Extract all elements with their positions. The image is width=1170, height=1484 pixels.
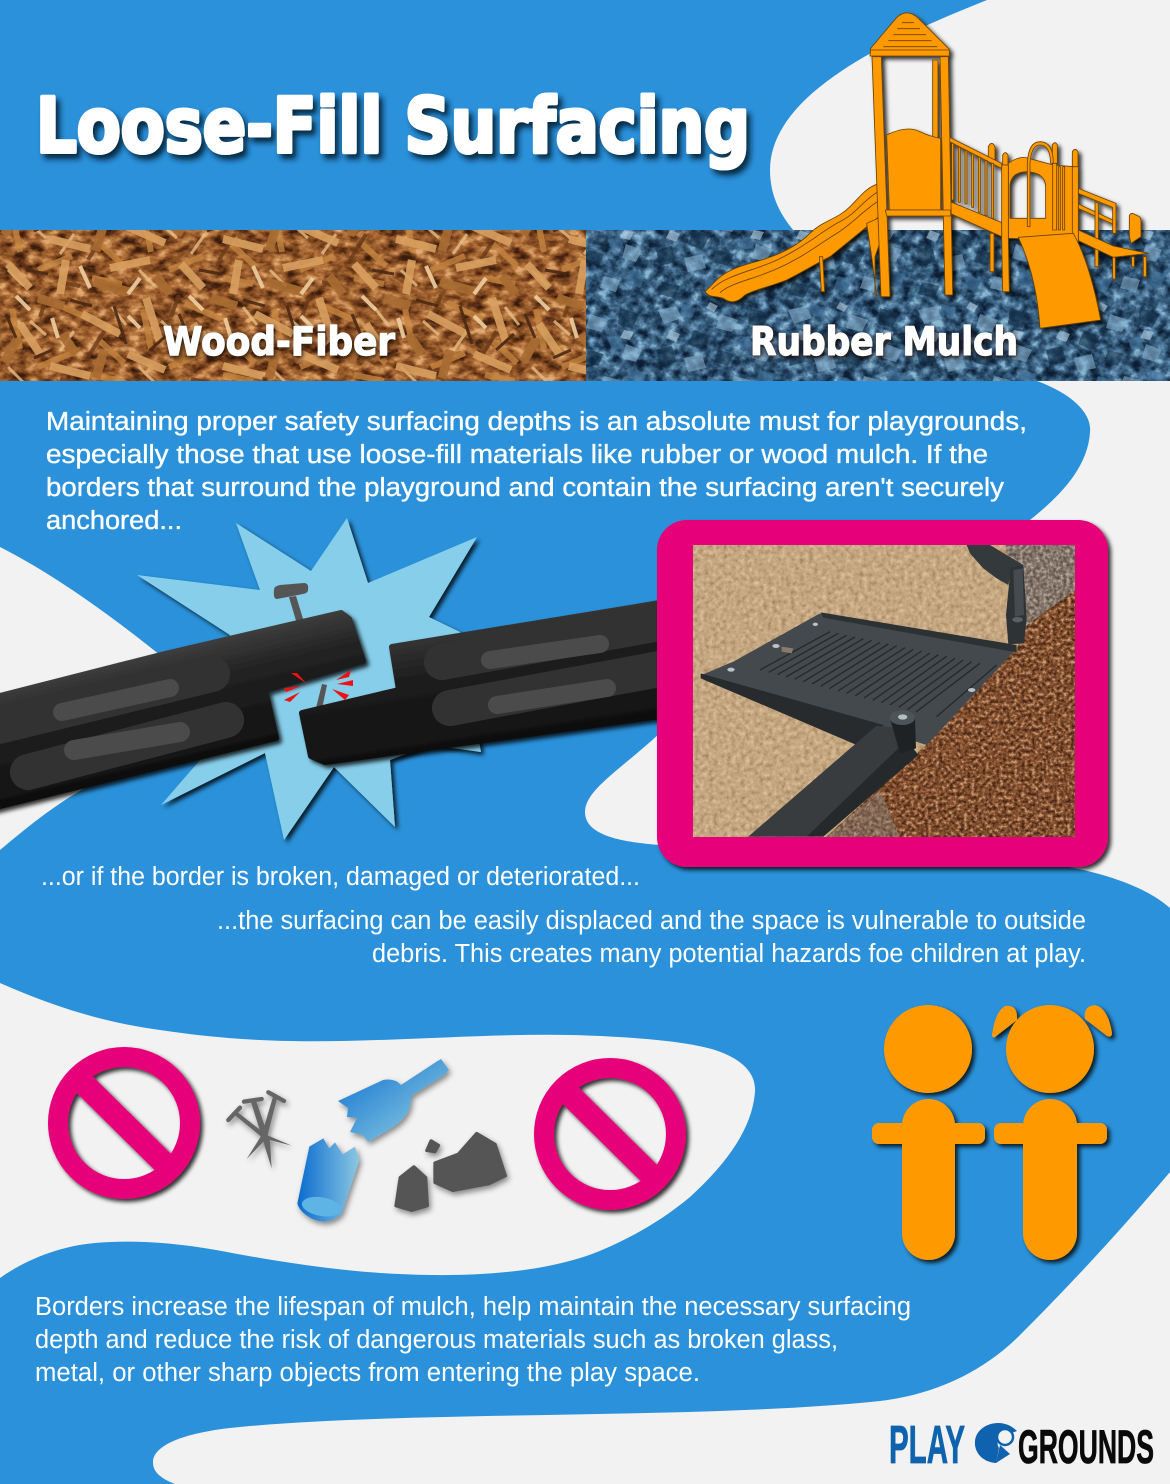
text block: surfacing displaced: debris. This creates many potential hazards foe children at play.: [372, 940, 1086, 968]
main tower posts: [867, 57, 953, 297]
illustration: orange playground structure: [705, 13, 1148, 328]
right stairs and platform: [1078, 188, 1148, 279]
text block: intro paragraph: Maintaining proper safety surfacing depths is an absolute must for playgrounds,: [46, 408, 1027, 436]
logo: playgrounds: PLAY: [889, 1415, 965, 1475]
icon: bent nails: [228, 1092, 292, 1168]
starburst: [137, 518, 481, 840]
text: border broken line: ...or if the border is broken, damaged or deteriorated...: [41, 863, 640, 891]
right border piece: [302, 603, 665, 762]
curved slide: [1018, 233, 1101, 328]
icon: boy figure: [872, 1005, 985, 1260]
main tower panel: [887, 129, 941, 210]
icon: rocks: [396, 1133, 505, 1211]
rubber ramp mat: [702, 613, 1017, 745]
text block: intro paragraph: [46, 408, 1027, 535]
text block: intro paragraph: especially those that use loose-fill materials like rubber or wood mulch. If the: [46, 441, 988, 469]
logo mark: [975, 1423, 1017, 1463]
left slide: [705, 183, 883, 302]
icon: debris group: [228, 1059, 505, 1221]
photo strip: rubber mulch: [586, 230, 1170, 381]
text block: surfacing displaced: [217, 907, 1086, 968]
icon: prohibition sign left: [58, 1057, 190, 1189]
text block: intro paragraph: anchored...: [46, 507, 182, 535]
text block: borders benefits: Borders increase the lifespan of mulch, help maintain the necessary surfacing: [35, 1293, 911, 1321]
roof: [870, 13, 949, 56]
icon: broken bottle base: [297, 1138, 359, 1221]
icon: prohibition sign right: [544, 1068, 676, 1200]
left border piece: [0, 613, 363, 808]
text block: borders benefits: metal, or other sharp objects from entering the play space.: [35, 1359, 700, 1387]
photo frame: magenta frame with border photo: [657, 520, 1108, 867]
logo: playgrounds: [889, 1415, 1154, 1475]
photo: border ramp in mulch: [693, 545, 1075, 837]
illustration: broken border with starburst: [0, 518, 665, 840]
title: Loose-Fill Surfacing: [36, 81, 750, 170]
red crack marks: [284, 670, 353, 702]
right tower: [988, 142, 1078, 292]
upper edging: [967, 545, 1023, 585]
photo strip: wood-fiber mulch: [0, 230, 586, 381]
label: wood-fiber: Wood-Fiber: [163, 320, 396, 365]
connecting deck and railing: [948, 137, 1002, 272]
post: [890, 718, 916, 749]
label: rubber mulch: Rubber Mulch: [750, 320, 1018, 365]
icon: girl figure: [992, 1005, 1112, 1260]
text block: borders benefits: depth and reduce the risk of dangerous materials such as broken glass,: [35, 1326, 838, 1354]
nail fragments: [274, 583, 327, 709]
text block: borders benefits: [35, 1293, 911, 1387]
icon: broken bottle neck: [338, 1059, 449, 1142]
front edging: [748, 726, 918, 837]
text block: surfacing displaced: ...the surfacing can be easily displaced and the space is vulnerable to outside: [217, 907, 1086, 935]
text block: intro paragraph: borders that surround the playground and contain the surfacing aren't securely: [46, 474, 1004, 502]
